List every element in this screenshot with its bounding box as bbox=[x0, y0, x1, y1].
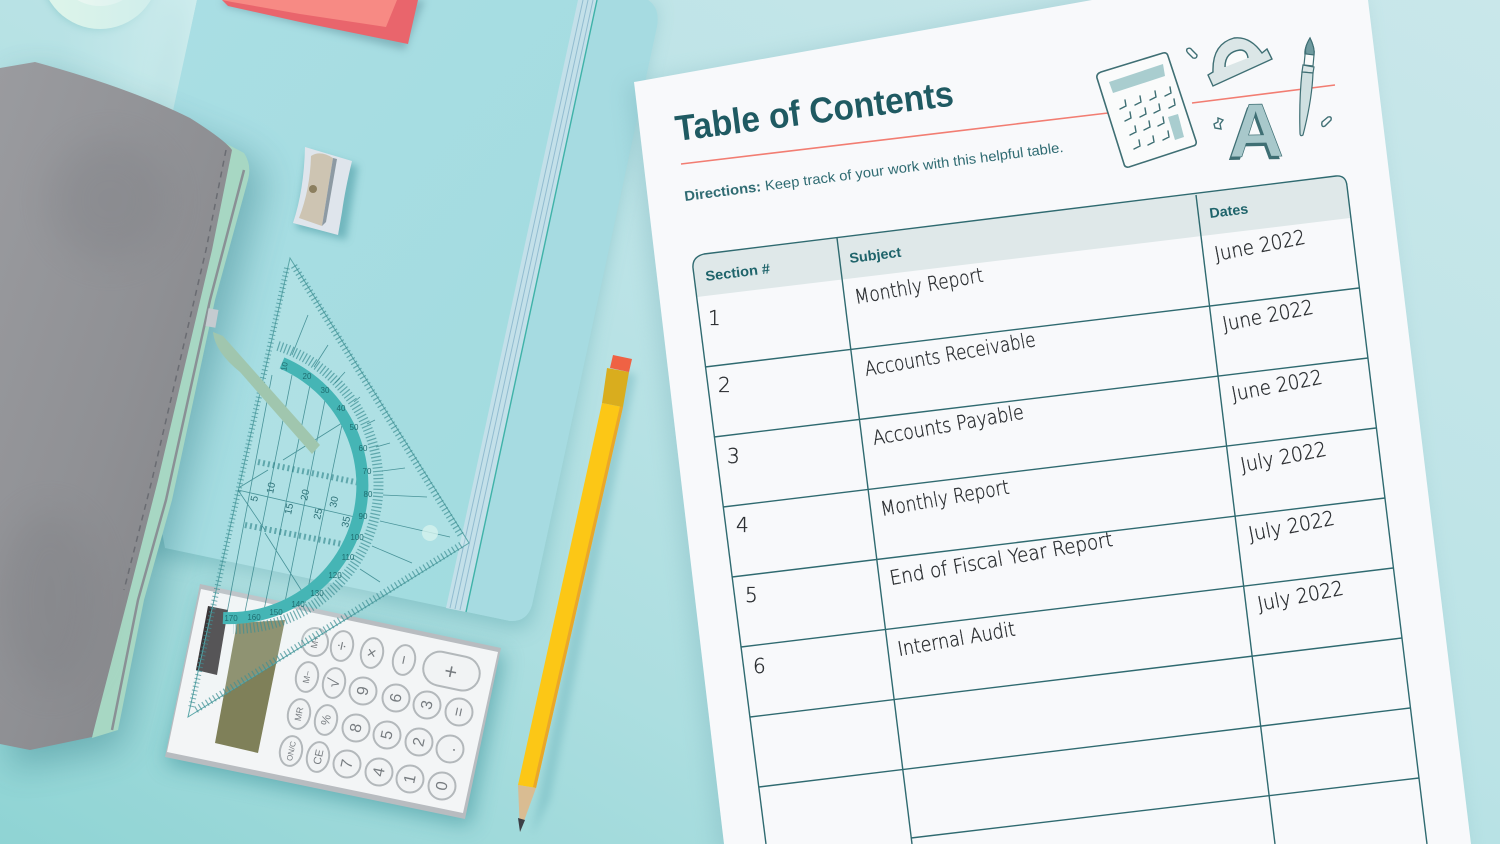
worksheet paper bbox=[627, 0, 1471, 844]
table grid bbox=[693, 176, 1427, 844]
keypad bbox=[277, 628, 483, 800]
pencil rubber tip bbox=[610, 355, 632, 372]
key labels: 4 bbox=[370, 766, 389, 778]
scale numbers: 90 bbox=[359, 512, 368, 521]
scale numbers: 10 bbox=[279, 361, 290, 372]
inner scale numbers: 15 bbox=[283, 502, 296, 516]
key labels bbox=[285, 635, 469, 792]
subject entries: Monthly Report bbox=[879, 475, 1011, 521]
date entries: July 2022 bbox=[1246, 506, 1336, 546]
scale numbers: 120 bbox=[328, 571, 342, 580]
header labels: Section # bbox=[704, 260, 771, 284]
subject entries: Internal Audit bbox=[896, 617, 1017, 661]
key labels: MR bbox=[293, 706, 305, 722]
pencil case bbox=[0, 62, 320, 768]
key labels: M+ bbox=[309, 635, 321, 649]
table bbox=[693, 176, 1427, 844]
key labels: 7 bbox=[338, 758, 357, 770]
key labels: 0 bbox=[433, 780, 452, 792]
section numbers: 2 bbox=[718, 373, 731, 397]
icon: protractor bbox=[1208, 38, 1272, 86]
section numbers: 5 bbox=[745, 583, 758, 607]
inner scale numbers: 10 bbox=[265, 481, 278, 495]
scale numbers: 80 bbox=[364, 490, 373, 499]
key labels: 8 bbox=[347, 722, 366, 734]
scale numbers: 140 bbox=[291, 600, 305, 609]
pencil sharpener bbox=[293, 147, 358, 240]
scale numbers: 150 bbox=[269, 608, 283, 617]
scale numbers: 100 bbox=[350, 533, 364, 542]
subject entries: Accounts Payable bbox=[871, 400, 1026, 450]
date entries: July 2022 bbox=[1238, 437, 1328, 477]
scale numbers: 130 bbox=[310, 589, 324, 598]
section numbers: 4 bbox=[736, 513, 749, 537]
date entries: June 2022 bbox=[1212, 225, 1307, 266]
directions text: Directions: Keep track of your work with this helpful table. bbox=[683, 139, 1064, 204]
glass jar lid bbox=[41, 0, 159, 31]
inner scale numbers: 5 bbox=[249, 494, 261, 503]
key labels: 1 bbox=[401, 773, 420, 785]
notebook bbox=[60, 0, 658, 629]
key labels: 9 bbox=[354, 685, 373, 697]
inner scale numbers: 20 bbox=[299, 488, 312, 502]
key labels: . bbox=[442, 745, 459, 753]
key labels: CE bbox=[312, 748, 326, 766]
key labels: ON/C bbox=[285, 740, 298, 762]
case zipper band bbox=[92, 143, 249, 738]
key labels: 6 bbox=[387, 692, 406, 704]
inner scale numbers: 25 bbox=[312, 507, 325, 521]
icon: letter A: A bbox=[1226, 91, 1282, 177]
key labels: 5 bbox=[378, 729, 397, 741]
semicircular scale bbox=[223, 363, 362, 618]
section numbers: 1 bbox=[708, 306, 721, 330]
key labels: 3 bbox=[418, 699, 437, 711]
pencil ferrule bbox=[602, 368, 629, 407]
key labels: 2 bbox=[410, 736, 429, 748]
zipper pull bbox=[206, 308, 320, 454]
ruler ticks bbox=[191, 266, 462, 711]
date entries: June 2022 bbox=[1229, 365, 1324, 406]
scale numbers: 60 bbox=[359, 444, 368, 453]
section numbers bbox=[708, 306, 766, 678]
key labels: √ bbox=[325, 677, 344, 689]
header labels: Dates bbox=[1208, 200, 1249, 221]
radial and grid lines bbox=[227, 315, 450, 622]
pencil lead bbox=[518, 785, 536, 832]
elastic band bbox=[446, 0, 597, 612]
section numbers: 3 bbox=[727, 444, 740, 468]
inner scale numbers bbox=[249, 481, 353, 529]
subject entries bbox=[853, 263, 1114, 661]
scale numbers: 170 bbox=[224, 614, 238, 623]
scale numbers: 40 bbox=[337, 404, 346, 413]
scale numbers: 160 bbox=[247, 613, 261, 622]
title: Table of Contents bbox=[673, 73, 956, 149]
inner scale numbers: 30 bbox=[328, 495, 341, 509]
key labels: % bbox=[318, 713, 334, 727]
key labels: = bbox=[450, 706, 469, 718]
scale numbers: 110 bbox=[342, 553, 355, 562]
scale numbers bbox=[224, 361, 373, 623]
case fabric bbox=[0, 62, 232, 750]
key labels: × bbox=[363, 647, 382, 659]
subject entries: Monthly Report bbox=[853, 263, 985, 309]
icon: letter A: A bbox=[1228, 88, 1284, 174]
solar panel bbox=[196, 606, 228, 675]
protractor set square bbox=[188, 258, 469, 717]
subject entries: End of Fiscal Year Report bbox=[888, 527, 1114, 590]
date entries bbox=[1212, 225, 1345, 616]
notebook flap bbox=[462, 0, 658, 621]
scale numbers: 20 bbox=[303, 372, 312, 381]
header labels: Subject bbox=[848, 244, 902, 266]
header labels bbox=[704, 200, 1249, 284]
title underline bbox=[681, 85, 1335, 164]
table header bands bbox=[693, 176, 1350, 297]
icon: push pin and paper clips bbox=[1187, 48, 1331, 129]
pencil bbox=[518, 355, 636, 835]
section numbers: 6 bbox=[753, 654, 766, 678]
scale numbers: 70 bbox=[363, 467, 372, 476]
key labels: + bbox=[442, 658, 460, 685]
lcd display bbox=[215, 620, 285, 753]
date entries: June 2022 bbox=[1220, 295, 1315, 336]
subject entries: Accounts Receivable bbox=[863, 327, 1037, 381]
scale numbers: 50 bbox=[350, 423, 359, 432]
key labels: ÷ bbox=[333, 640, 352, 652]
pink eraser bbox=[222, 0, 425, 50]
icon: paintbrush bbox=[1300, 38, 1314, 136]
icon: calculator bbox=[1097, 53, 1196, 167]
date entries: July 2022 bbox=[1255, 576, 1345, 616]
scale numbers: 30 bbox=[321, 386, 330, 395]
key labels: M− bbox=[301, 670, 313, 684]
inner scale numbers: 35 bbox=[340, 515, 353, 529]
key labels: − bbox=[395, 654, 414, 666]
pencil body bbox=[518, 403, 623, 788]
